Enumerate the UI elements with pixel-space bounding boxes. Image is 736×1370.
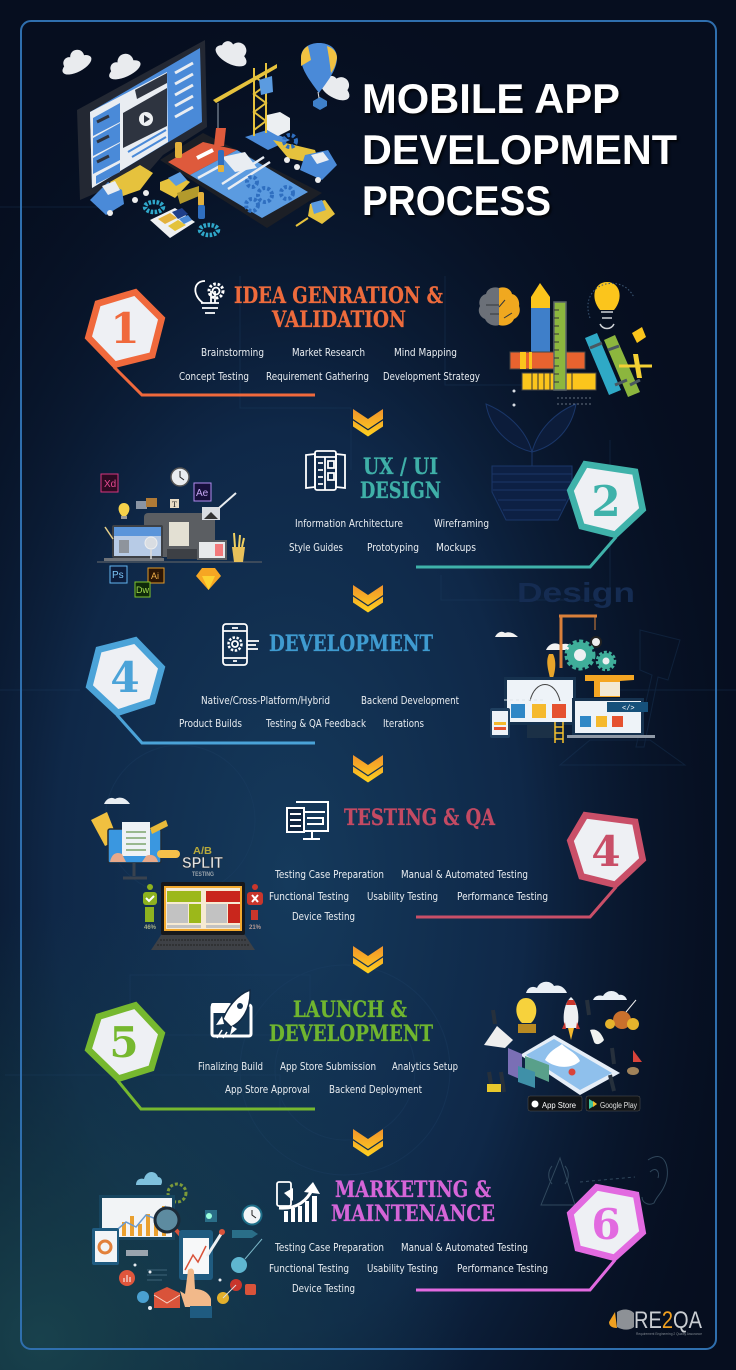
activities list: Manual & Automated Testing bbox=[401, 1242, 528, 1254]
icon: tablet with video bbox=[77, 40, 207, 200]
illustration: A/B split testing: 46% bbox=[144, 925, 157, 931]
step 5 badge bbox=[88, 1005, 315, 1109]
illustration: A/B split testing: TESTING bbox=[192, 872, 214, 878]
heading: UX / UI bbox=[363, 454, 438, 480]
heading bbox=[269, 997, 434, 1047]
app store badge bbox=[528, 1096, 582, 1111]
illustration: app launch bbox=[484, 982, 642, 1111]
illustration: A/B split testing: SPLIT bbox=[182, 855, 223, 872]
panel: step 5 launch bbox=[88, 982, 642, 1111]
heading: DEVELOPMENT bbox=[269, 1021, 434, 1047]
icon: marketing growth bbox=[277, 1182, 320, 1222]
step 4 badge: 4 bbox=[591, 827, 621, 876]
heading: MAINTENANCE bbox=[331, 1201, 495, 1227]
icon: phone with gear bbox=[223, 624, 259, 665]
arrow: step 3 to 4 bbox=[353, 755, 383, 782]
illustration: web development bbox=[490, 616, 655, 743]
google play badge bbox=[586, 1096, 640, 1111]
icon: bulldozer bbox=[160, 172, 199, 204]
illustration: design tools: Ae bbox=[196, 488, 209, 499]
activities list: Backend Development bbox=[361, 695, 459, 707]
heading: VALIDATION bbox=[271, 307, 406, 333]
heading bbox=[331, 1177, 495, 1227]
step 6 badge bbox=[416, 1187, 643, 1290]
activities list: Product Builds bbox=[179, 718, 242, 730]
panel: step 2 ux ui design bbox=[97, 451, 643, 597]
activities list: Device Testing bbox=[292, 911, 355, 923]
activities list: App Store Approval bbox=[225, 1084, 310, 1096]
activities list: Requirement Gathering bbox=[266, 371, 369, 383]
activities list: Brainstorming bbox=[201, 347, 264, 359]
logo: RE2QA bbox=[609, 1307, 703, 1336]
logo: RE2QA: RE2QA bbox=[634, 1307, 702, 1334]
step 3 badge: 4 bbox=[110, 653, 140, 702]
arrow: step 1 to 2 bbox=[353, 409, 383, 436]
panel: step 1 idea generation bbox=[70, 0, 652, 406]
logo: RE2QA: Requirement Engineering 2 Quality Assurance bbox=[636, 1331, 703, 1336]
app store badge: App Store bbox=[542, 1101, 577, 1110]
activities list: Information Architecture bbox=[295, 518, 403, 530]
step 2 badge bbox=[416, 464, 643, 567]
activities list: Mockups bbox=[436, 542, 476, 554]
heading: TESTING & QA bbox=[344, 805, 496, 831]
illustration: A/B split testing: 21% bbox=[249, 925, 262, 931]
activities list: Device Testing bbox=[292, 1283, 355, 1295]
title bbox=[362, 75, 677, 224]
activities list: Analytics Setup bbox=[392, 1061, 458, 1073]
activities list: Prototyping bbox=[367, 542, 419, 554]
icon: crane bbox=[213, 63, 290, 150]
activities list: Backend Deployment bbox=[329, 1084, 422, 1096]
activities list: Testing Case Preparation bbox=[274, 869, 384, 881]
illustration: design tools: Dw bbox=[136, 585, 149, 595]
step 3 badge bbox=[89, 640, 315, 743]
panel: step 3 development bbox=[89, 616, 655, 743]
step 1 badge: 1 bbox=[110, 304, 140, 353]
activities list: Mind Mapping bbox=[394, 347, 457, 359]
heading bbox=[234, 283, 443, 333]
heading: DESIGN bbox=[360, 478, 441, 504]
activities list: Performance Testing bbox=[457, 1263, 548, 1275]
panel: step 4 testing bbox=[91, 798, 643, 950]
illustration: stationery and ideas bbox=[70, 0, 652, 406]
arrow: step 5 to 6 bbox=[353, 1129, 383, 1156]
icon: hot-air balloon bbox=[301, 43, 337, 110]
illustration: design tools bbox=[97, 468, 262, 597]
activities list: Testing Case Preparation bbox=[274, 1242, 384, 1254]
illustration: A/B split testing: A/B bbox=[193, 846, 212, 857]
panel: step 6 marketing bbox=[92, 1172, 643, 1318]
ghost antenna and ear bbox=[541, 1157, 667, 1205]
hero illustration bbox=[56, 34, 356, 238]
icon: forklift bbox=[296, 200, 335, 226]
illustration: design tools: Ps bbox=[112, 570, 124, 581]
activities list bbox=[179, 695, 459, 730]
arrow: step 2 to 3 bbox=[353, 585, 383, 612]
title: DEVELOPMENT bbox=[362, 126, 677, 173]
icon: left dump truck bbox=[90, 165, 153, 216]
activities list: App Store Submission bbox=[280, 1061, 376, 1073]
activities list bbox=[269, 869, 548, 923]
icon: wireframe bbox=[306, 451, 345, 490]
title: MOBILE APP bbox=[362, 75, 620, 122]
step 5 badge: 5 bbox=[109, 1018, 139, 1067]
activities list: Testing & QA Feedback bbox=[265, 718, 367, 730]
activities list: Performance Testing bbox=[457, 891, 548, 903]
activities list: Wireframing bbox=[434, 518, 489, 530]
icon: rocket window bbox=[211, 990, 251, 1038]
illustration: design tools: Xd bbox=[104, 479, 116, 490]
icon: workers bbox=[175, 142, 224, 219]
arrow: step 4 to 5 bbox=[353, 946, 383, 974]
step 4 badge bbox=[416, 815, 643, 917]
illustration: web development: </> bbox=[622, 705, 635, 713]
step 2 badge: 2 bbox=[591, 477, 621, 526]
step 6 badge: 6 bbox=[591, 1200, 621, 1249]
illustration: design tools: Ai bbox=[151, 571, 159, 581]
activities list: Manual & Automated Testing bbox=[401, 869, 528, 881]
activities list bbox=[179, 347, 480, 383]
activities list: Native/Cross-Platform/Hybrid bbox=[201, 695, 330, 707]
activities list: Style Guides bbox=[289, 542, 343, 554]
title: PROCESS bbox=[362, 177, 551, 224]
activities list bbox=[269, 1242, 548, 1295]
illustration: analytics and marketing bbox=[92, 1172, 262, 1318]
icon: clouds bbox=[56, 34, 356, 105]
heading: IDEA GENRATION & bbox=[234, 283, 443, 309]
ghost word: Design: Design bbox=[517, 577, 635, 608]
activities list bbox=[198, 1061, 458, 1096]
icon: smartphone bbox=[160, 133, 322, 228]
activities list: Market Research bbox=[292, 347, 365, 359]
icon: right dump truck bbox=[273, 135, 337, 183]
activities list: Iterations bbox=[383, 718, 424, 730]
activities list: Functional Testing bbox=[269, 891, 349, 903]
activities list: Finalizing Build bbox=[198, 1061, 263, 1073]
activities list bbox=[289, 518, 489, 554]
activities list: Concept Testing bbox=[179, 371, 249, 383]
illustration: design tools: T bbox=[172, 500, 177, 509]
activities list: Development Strategy bbox=[383, 371, 480, 383]
activities list: Functional Testing bbox=[269, 1263, 349, 1275]
ghost plant bbox=[486, 404, 576, 520]
heading: DEVELOPMENT bbox=[269, 631, 434, 657]
heading: MARKETING & bbox=[335, 1177, 491, 1203]
activities list: Usability Testing bbox=[367, 1263, 438, 1275]
google play badge: Google Play bbox=[600, 1101, 637, 1110]
icon: gears and tile bbox=[145, 202, 218, 238]
step 1 badge bbox=[88, 292, 315, 395]
icon: checklist and monitor bbox=[287, 802, 328, 839]
heading bbox=[360, 454, 441, 504]
activities list: Usability Testing bbox=[367, 891, 438, 903]
icon: bulb with gear bbox=[195, 281, 223, 313]
heading: LAUNCH & bbox=[293, 997, 407, 1023]
illustration: A/B split testing bbox=[91, 798, 263, 950]
